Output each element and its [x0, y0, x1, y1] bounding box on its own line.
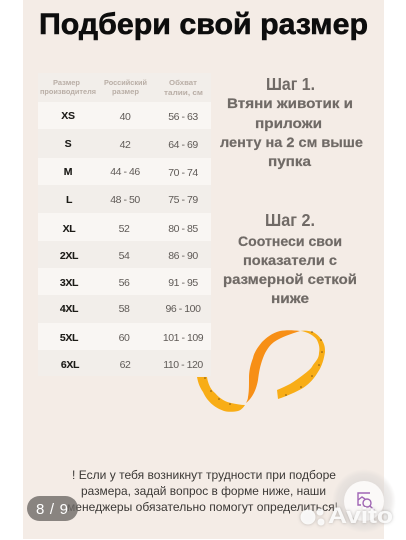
avito watermark: Avito: [328, 503, 393, 528]
step 1 text: [220, 74, 363, 169]
waist column: 91 - 95: [168, 277, 198, 289]
russian sizes column: 62: [120, 359, 131, 371]
footer note: [67, 468, 338, 514]
russian sizes column: 52: [119, 223, 130, 235]
manufacturer sizes column: M: [64, 166, 73, 178]
step 2 text: показатели с: [243, 252, 337, 268]
waist column: 75 - 79: [168, 194, 198, 206]
icon: image search: [358, 493, 374, 510]
step 2 text: Соотнеси свои: [238, 233, 342, 249]
waist column: 86 - 90: [168, 250, 198, 262]
title: Подбери свой размер: [39, 8, 368, 41]
step 1 text: Шаг 1.: [266, 74, 315, 94]
russian sizes column: [110, 111, 140, 371]
russian sizes column: 44 - 46: [110, 166, 140, 178]
table header: талии, см: [164, 90, 203, 97]
step 1 text: ленту на 2 см выше: [220, 134, 363, 150]
table header: производителя: [40, 89, 96, 96]
waist column: 64 - 69: [168, 139, 198, 151]
manufacturer sizes column: L: [66, 194, 73, 206]
russian sizes column: 42: [120, 139, 131, 151]
waist column: 96 - 100: [166, 303, 201, 315]
step 1 text: Втяни животик и: [227, 95, 353, 111]
table header: [40, 79, 203, 97]
manufacturer sizes column: 5XL: [60, 332, 79, 344]
russian sizes column: 40: [120, 111, 131, 123]
waist column: 80 - 85: [168, 223, 198, 235]
table header: Российский: [104, 79, 147, 87]
search button: [332, 469, 396, 533]
manufacturer sizes column: XS: [61, 110, 75, 122]
russian sizes column: 56: [119, 277, 130, 289]
step 2 text: Шаг 2.: [265, 210, 315, 230]
icon: measuring tape: [197, 330, 325, 412]
gallery counter badge: [27, 496, 78, 521]
footer note: размера, задай вопрос в форме ниже, наши: [81, 484, 326, 498]
manufacturer sizes column: S: [65, 138, 72, 150]
step 1 text: приложи: [255, 115, 322, 131]
table header: размер: [112, 89, 139, 96]
avito watermark: [300, 503, 393, 528]
russian sizes column: 60: [119, 332, 130, 344]
manufacturer sizes column: [60, 110, 80, 371]
manufacturer sizes column: 4XL: [60, 303, 79, 315]
russian sizes column: 54: [119, 250, 130, 262]
manufacturer sizes column: 6XL: [61, 359, 80, 371]
russian sizes column: 58: [119, 303, 130, 315]
footer note: ! Если у тебя возникнут трудности при подборе: [72, 468, 336, 482]
manufacturer sizes column: 3XL: [60, 277, 79, 289]
manufacturer sizes column: 2XL: [60, 250, 79, 262]
table header: Обхват: [169, 79, 198, 87]
step 1 text: пупка: [268, 153, 311, 169]
step 2 text: [223, 210, 357, 306]
footer note: менеджеры обязательно помогут определиться!: [67, 500, 338, 514]
waist column: 110 - 120: [163, 359, 203, 371]
russian sizes column: 48 - 50: [110, 194, 140, 206]
step 2 text: ниже: [271, 290, 309, 306]
step 2 text: размерной сеткой: [223, 271, 357, 287]
waist column: 70 - 74: [168, 167, 198, 179]
waist column: 101 - 109: [163, 332, 204, 344]
gallery counter badge: 8 / 9: [36, 501, 68, 518]
waist column: 56 - 63: [168, 111, 198, 123]
table background and row bands: [38, 73, 211, 376]
waist column: [163, 111, 204, 371]
manufacturer sizes column: XL: [63, 223, 76, 235]
size table: [38, 73, 211, 376]
table header: Размер: [53, 80, 80, 87]
